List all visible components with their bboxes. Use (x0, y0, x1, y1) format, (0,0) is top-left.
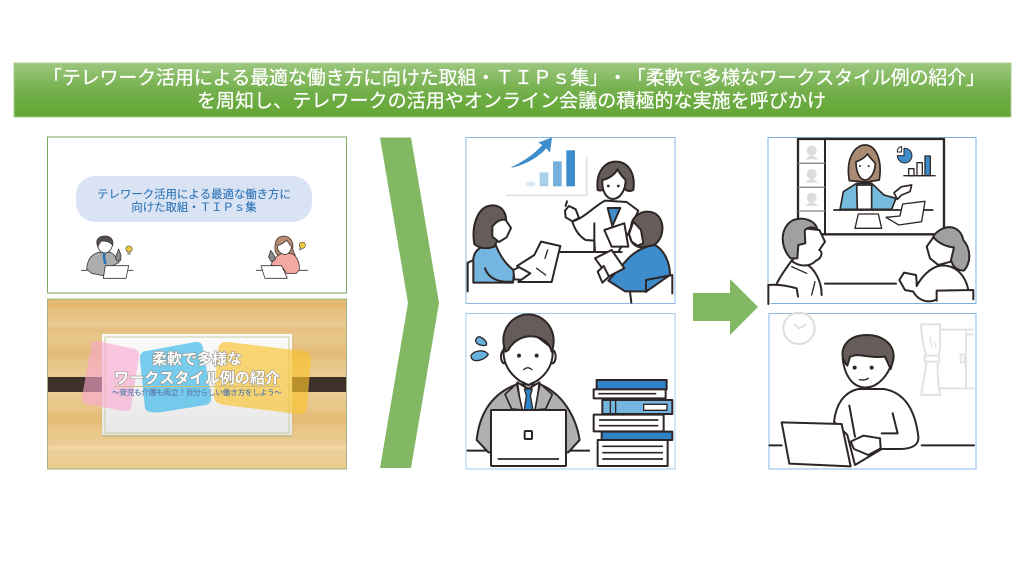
icon: wall clock (783, 313, 815, 344)
title banner: 「テレワーク活用による最適な働き方に向けた取組・ＴＩＰｓ集」・「柔軟で多様なワークスタイル例の紹介」 (43, 67, 985, 89)
icon: man with laptop (81, 236, 133, 278)
title banner: を周知し、テレワークの活用やオンライン会議の積極的な実施を呼びかけ (197, 90, 826, 112)
presenter on screen (840, 145, 912, 210)
bar chart (903, 156, 936, 176)
participant thumbnails (805, 146, 818, 206)
video screen (798, 139, 944, 234)
icon: pie chart (897, 147, 912, 163)
dark band (48, 377, 346, 392)
woman viewer (899, 227, 973, 301)
presenter (565, 162, 638, 252)
panel: online meeting (768, 138, 976, 304)
seated woman (468, 205, 597, 291)
icon: woman with laptop (256, 236, 308, 278)
title banner (14, 63, 1011, 117)
man viewer (768, 219, 896, 304)
cover title: ～育児も介護も両立！自分らしい働き方をしよう～ (112, 387, 282, 397)
coloured sticky notes (82, 341, 311, 414)
cover title: 柔軟で多様な (152, 350, 242, 368)
panel: troubled worker with books (466, 314, 675, 469)
white card (102, 334, 292, 437)
panel: TIPs collection cover (48, 137, 346, 293)
panel: meeting with chart (466, 137, 675, 304)
panel: flexible work styles cover (48, 299, 346, 469)
books stack (594, 380, 672, 466)
cover title (112, 350, 282, 397)
cover title: ワークスタイル例の紹介 (114, 370, 280, 387)
right arrow (693, 279, 758, 335)
chart: rising bars (506, 137, 587, 195)
worker (467, 314, 590, 466)
pill heading (76, 176, 312, 222)
icon: sweat drops (471, 337, 488, 361)
panel: working from home (769, 313, 976, 469)
pill heading: 向けた取組・ＴＩＰｓ集 (131, 200, 257, 214)
window with curtain (921, 324, 974, 395)
seated man (595, 212, 672, 303)
pill heading: テレワーク活用による最適な働き方に (97, 187, 291, 201)
chevron arrow (380, 138, 439, 468)
man at laptop (769, 335, 974, 466)
